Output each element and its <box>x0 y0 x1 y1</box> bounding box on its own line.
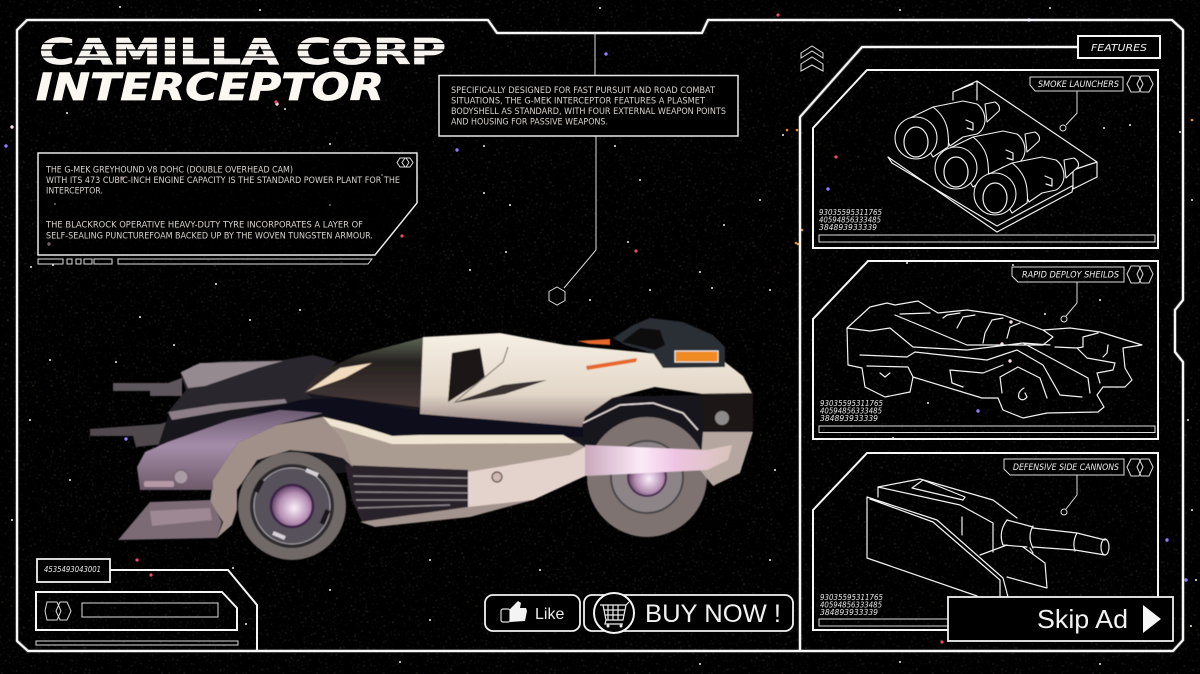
serial numbers: 384893933339 <box>819 223 877 232</box>
wheel arch trim <box>583 403 698 430</box>
rear cabin side window <box>448 348 485 402</box>
serial numbers: 93035595311765 <box>819 208 882 217</box>
door panel <box>468 447 585 508</box>
nose <box>137 410 323 490</box>
lower sill <box>360 500 533 527</box>
serial numbers: 93035595311765 <box>820 399 883 408</box>
front splitter <box>118 500 222 540</box>
launcher tube two <box>935 131 1040 189</box>
leader line <box>1066 282 1077 316</box>
like button <box>485 595 580 631</box>
skip ad button <box>948 597 1173 641</box>
code tag <box>37 559 110 582</box>
launcher tube three <box>974 157 1078 215</box>
roof crease <box>455 347 508 402</box>
inner right frame line <box>800 47 1078 652</box>
rear round lamp <box>715 411 729 425</box>
icon: play triangle <box>1143 605 1161 633</box>
console panel <box>36 592 237 630</box>
front fender arch <box>210 417 353 538</box>
leader dot <box>1061 316 1067 322</box>
bottom bar <box>36 641 238 645</box>
engine and tyre description panel: WITH ITS 473 CUBIC-INCH ENGINE CAPACITY IS THE STANDARD POWER PLANT FOR THE <box>46 176 400 186</box>
features tab <box>1078 36 1160 58</box>
icon: thumbs up <box>501 601 527 622</box>
label: smoke launchers <box>1030 77 1123 91</box>
engine and tyre description panel <box>38 153 417 255</box>
code tag: 4535493043001 <box>44 565 101 574</box>
buy now button <box>584 593 793 633</box>
windshield <box>303 337 426 408</box>
leader line <box>1066 91 1077 125</box>
orange vents <box>577 339 637 370</box>
rear bumper <box>700 432 753 486</box>
pink side pipe <box>585 445 732 476</box>
serial numbers: 384893933339 <box>820 414 878 423</box>
serial numbers: 40594856333485 <box>820 600 882 610</box>
serial numbers <box>820 593 883 617</box>
leader line <box>1066 475 1077 509</box>
rear wheel <box>587 417 707 537</box>
icon: chevrons <box>801 46 823 71</box>
panel: rapid deploy shields <box>813 261 1158 439</box>
nose lamp <box>174 470 188 484</box>
serial numbers: 40594856333485 <box>819 216 881 224</box>
windshield glare <box>306 363 372 392</box>
icon: double hexagon <box>45 602 71 620</box>
orange rear light <box>675 351 718 362</box>
status bars under engine panel <box>38 259 372 264</box>
icon: shopping cart <box>594 593 634 633</box>
engine and tyre description panel: INTERCEPTOR. <box>46 186 103 196</box>
strip highlight <box>322 417 577 444</box>
car illustration <box>90 318 753 560</box>
engine and tyre description panel: SELF-SEALING PUNCTUREFOAM BACKED UP BY THE WOVEN TUNGSTEN ARMOUR. <box>46 232 373 242</box>
spoiler <box>613 318 725 368</box>
side crease <box>453 380 547 403</box>
front wheel <box>238 452 346 560</box>
icon: double hexagon <box>1127 459 1153 476</box>
center description panel <box>439 76 738 136</box>
navy side band <box>250 398 583 437</box>
cream side strip <box>323 417 585 508</box>
spoiler cabin glass <box>622 328 665 350</box>
label: rapid deploy shields <box>1012 267 1124 282</box>
hood <box>168 355 337 412</box>
upper hull <box>420 333 752 427</box>
serial numbers <box>819 208 882 232</box>
panel: smoke launchers <box>813 70 1158 248</box>
label: smoke launchers: SMOKE LAUNCHERS <box>1038 79 1120 89</box>
center description panel: AND HOUSING FOR PASSIVE WEAPONS. <box>451 118 608 128</box>
features tab: FEATURES <box>1091 43 1148 54</box>
cannon muzzle <box>1101 539 1109 555</box>
like button: Like <box>535 606 564 623</box>
label: defensive side cannons: DEFENSIVE SIDE CANNONS <box>1013 462 1120 472</box>
center description panel: SITUATIONS, THE G-MEK INTERCEPTOR FEATURES A PLASMET <box>451 96 706 106</box>
buy now button: BUY NOW ! <box>645 600 781 628</box>
icon: double hexagon <box>1127 76 1153 92</box>
rear light housing <box>702 393 753 430</box>
console bar <box>82 603 218 617</box>
serial numbers: 40594856333485 <box>820 406 882 416</box>
serial numbers: 384893933339 <box>820 608 878 617</box>
launcher tube one <box>895 101 1000 159</box>
hood highlight <box>181 361 283 388</box>
label: rapid deploy shields: RAPID DEPLOY SHEILDS <box>1022 270 1120 280</box>
serial numbers: 93035595311765 <box>820 593 883 602</box>
dark car base <box>150 365 752 485</box>
code tag and bottom-left console <box>36 559 257 652</box>
lower front gun <box>90 420 175 447</box>
panel: defensive side cannons <box>813 453 1158 630</box>
door bolt <box>492 472 502 482</box>
serial numbers <box>820 399 883 423</box>
line drawing: smoke launchers <box>888 81 1097 232</box>
skip ad button: Skip Ad <box>1037 604 1128 634</box>
splitter panel <box>150 508 212 526</box>
icon: double hexagon <box>397 158 413 167</box>
leader dot <box>1061 509 1067 515</box>
center description panel: BODYSHELL AS STANDARD, WITH FOUR EXTERNAL WEAPON POINTS <box>451 107 726 117</box>
hood side trim <box>168 399 287 420</box>
line drawing: vehicle wireframe <box>847 301 1142 418</box>
icon: double hexagon <box>1127 266 1153 283</box>
console connector line <box>110 570 257 652</box>
side grille <box>345 465 468 522</box>
line drawing: cannon <box>867 479 1105 600</box>
center description panel: SPECIFICALLY DESIGNED FOR FAST PURSUIT AND ROAD COMBAT <box>451 86 716 96</box>
leader dot <box>1060 125 1066 131</box>
engine and tyre description panel: THE BLACKROCK OPERATIVE HEAVY-DUTY TYRE INCORPORATES A LAYER OF <box>45 220 363 230</box>
upper front gun <box>113 378 182 396</box>
title: INTERCEPTOR <box>36 66 384 109</box>
label: defensive side cannons <box>1004 459 1124 475</box>
center callout connector <box>549 33 596 305</box>
title <box>36 32 450 109</box>
title: CAMILLA CORP <box>39 32 446 73</box>
nose slot <box>144 481 174 487</box>
engine and tyre description panel: THE G-MEK GREYHOUND V8 DOHC (DOUBLE OVERHEAD CAM) <box>45 166 293 176</box>
